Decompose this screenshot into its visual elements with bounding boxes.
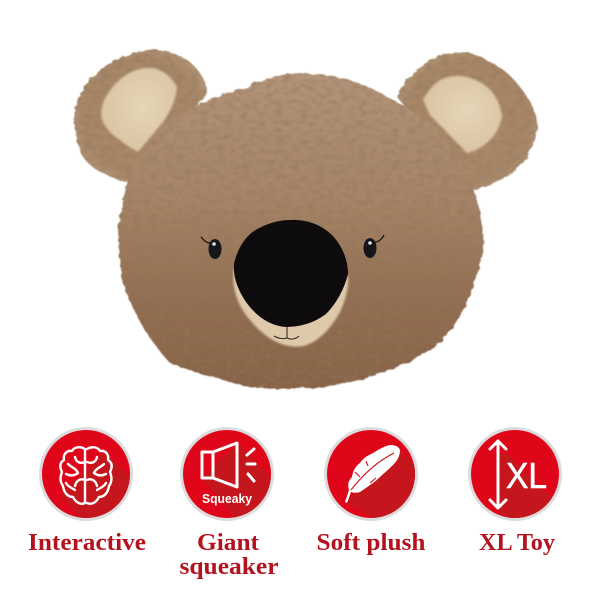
icon: feather — [324, 427, 418, 521]
label: Giant squeaker: Giant — [197, 530, 259, 556]
label: XL Toy: XL Toy — [479, 530, 555, 556]
icon: XL size: XL — [506, 455, 547, 496]
koala plush toy — [74, 50, 538, 389]
right eye — [364, 235, 384, 258]
icon: XL size — [470, 428, 562, 530]
left eye — [201, 237, 222, 259]
label: Giant squeaker — [180, 530, 279, 580]
mouth — [274, 327, 299, 339]
nose — [234, 220, 348, 327]
icon: brain — [40, 428, 135, 530]
icon: speaker: Squeaky — [202, 492, 252, 506]
left ear — [74, 50, 208, 182]
infographic canvas — [28, 48, 562, 579]
label: Interactive: Interactive — [28, 530, 146, 556]
label: Giant squeaker: squeaker — [180, 554, 279, 580]
muzzle — [233, 250, 348, 347]
label: Soft plush: Soft plush — [316, 530, 426, 556]
head — [118, 73, 484, 389]
right ear — [397, 52, 538, 190]
icon: speaker — [182, 428, 275, 530]
